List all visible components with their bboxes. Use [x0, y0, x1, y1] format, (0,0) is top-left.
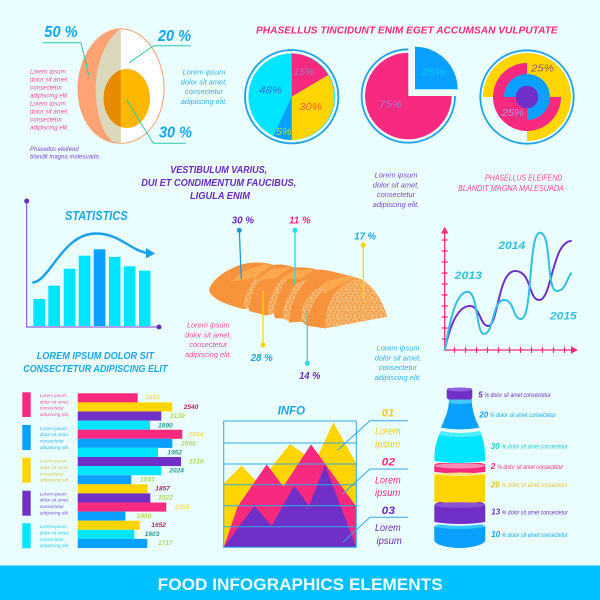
- bar values: [137, 395, 204, 547]
- pin 30 %: 30 %: [232, 214, 255, 226]
- label: 10 %: % dolor sit amet consectetur: [502, 533, 569, 539]
- panel: info area chart: [224, 403, 408, 547]
- purple text block: [30, 147, 100, 160]
- pie chart: four slices: 48%: [259, 84, 282, 96]
- purple text block: [373, 170, 419, 209]
- bars: [33, 249, 150, 326]
- label: 10 %: [491, 530, 569, 539]
- purple text block: blandit magna malesuada.: [30, 154, 100, 160]
- label: 30 %: % dolor sit amet consectetur: [502, 444, 569, 450]
- label: 5 %: [478, 390, 552, 399]
- bar values: 1650: [145, 395, 160, 402]
- item 01: ipsum: [375, 440, 400, 451]
- blue text block: dolor sit amet,: [181, 77, 227, 86]
- legend text: adipiscing elit.: [40, 445, 69, 450]
- leader lines: [338, 421, 408, 542]
- label: 20 %: [478, 411, 557, 420]
- label: 2 %: 2: [490, 462, 496, 471]
- bar values: 2130: [169, 413, 185, 420]
- label: 10 %: 10: [491, 530, 501, 539]
- heading: bread: LIGULA ENIM: [190, 190, 250, 202]
- item 01: [375, 408, 401, 451]
- legend text: Lorem ipsum: [40, 524, 67, 529]
- axes: [24, 198, 162, 330]
- pink text block: [185, 320, 232, 359]
- label: 30 %: [491, 442, 569, 451]
- pin 14 %: 14 %: [299, 370, 321, 382]
- mountains: [224, 422, 356, 547]
- legend text: consectetur: [40, 406, 64, 411]
- pink text block: adipiscing elit.: [30, 92, 69, 100]
- legend text: dolor sit amet,: [40, 530, 69, 536]
- legend text: adipiscing elit.: [40, 478, 69, 483]
- blue text block: adipiscing elit.: [375, 373, 421, 382]
- bar values: 2024: [168, 468, 184, 475]
- item 03: 03: [382, 505, 395, 517]
- bar values: 1450: [137, 513, 152, 520]
- purple text block: Phasellus eleifend: [30, 147, 79, 153]
- blue text block: consectetur: [379, 363, 418, 372]
- panel: line chart: [441, 173, 578, 354]
- label: 5 %: % dolor sit amet consectetur: [484, 393, 552, 399]
- bar values: 1717: [158, 540, 173, 547]
- purple text block: consectetur: [377, 190, 416, 199]
- label: 20 %: 20 %: [157, 28, 191, 45]
- heading: [458, 173, 564, 193]
- heading: PHASELLUS ELEIFEND: [485, 173, 562, 182]
- heading: bars: CONSECTETUR ADIPISCING ELIT: [23, 364, 168, 375]
- label: 2014: 2014: [497, 240, 525, 252]
- pie chart: exploded quarter: 25%: [421, 67, 445, 79]
- purple text block: dolor sit amet,: [373, 180, 419, 189]
- pin 14 %: [299, 310, 321, 382]
- radial chart: 25%: [501, 107, 524, 119]
- bar values: 2540: [183, 404, 199, 411]
- item 03: ipsum: [376, 536, 402, 547]
- pink text block: consectetur: [189, 340, 228, 349]
- item 02: Lorem: [375, 475, 401, 486]
- bar values: 2210: [188, 458, 204, 465]
- panel: bottle: [434, 388, 569, 548]
- legend text: consectetur: [40, 504, 64, 509]
- label: 5 %: 5: [478, 390, 483, 399]
- pie chart: exploded quarter: [362, 47, 458, 143]
- pink text block: adipiscing elit.: [185, 350, 232, 359]
- label: 2015: 2015: [549, 311, 578, 323]
- item 02: 02: [382, 457, 395, 469]
- legend text: Lorem ipsum: [40, 426, 67, 431]
- item 03: Lorem: [375, 523, 401, 534]
- pie chart: exploded quarter: 75%: [379, 99, 402, 111]
- bottle illustration: [434, 388, 485, 548]
- pin 11 %: 11 %: [289, 214, 311, 226]
- pink text block: Lorem ipsum: [30, 68, 66, 76]
- heading: info: INFO: [278, 403, 306, 417]
- label: 30 %: 30 %: [159, 125, 192, 142]
- footer banner: FOOD INFOGRAPHICS ELEMENTS: [158, 575, 443, 594]
- pie chart: four slices: 30%: [299, 101, 322, 113]
- footer banner: [0, 566, 600, 600]
- pink text block: dolor sit amet,: [30, 76, 69, 84]
- item 03: [375, 505, 402, 547]
- label: 50 %: 50 %: [44, 24, 78, 41]
- legend text: dolor sit amet,: [40, 399, 69, 404]
- bar values: 1603: [145, 531, 160, 538]
- pin 30 %: [232, 214, 255, 279]
- panel: bread chart: [185, 170, 421, 382]
- pie chart: four slices: 15%: [294, 66, 314, 78]
- label: 30 %: 30: [491, 442, 500, 451]
- legend text: adipiscing elit.: [40, 510, 69, 515]
- bar values: 2355: [174, 504, 190, 511]
- item 01: 01: [382, 408, 394, 420]
- legend text: dolor sit amet,: [40, 498, 69, 503]
- pink text block: Lorem ipsum: [30, 100, 66, 108]
- label: 20 %: 20: [478, 411, 489, 420]
- line: purple series: [445, 241, 572, 350]
- legend swatches: [22, 392, 31, 548]
- legend text: Lorem ipsum: [40, 491, 67, 496]
- axes: [441, 227, 578, 354]
- legend text: consectetur: [40, 471, 64, 476]
- pie chart: four slices: [245, 50, 338, 143]
- legend text: Lorem ipsum: [40, 459, 67, 464]
- item 02: [375, 457, 401, 499]
- pin 17 %: [354, 230, 377, 298]
- purple text block: Lorem ipsum: [375, 170, 417, 180]
- bar values: 1541: [140, 477, 155, 484]
- item 02: ipsum: [375, 488, 400, 499]
- pin 17 %: 17 %: [354, 230, 377, 242]
- bar values: 2560: [180, 440, 196, 447]
- panel: horizontal bar chart: [22, 392, 204, 548]
- egg illustration: [78, 29, 164, 143]
- label: 13 %: 13: [491, 508, 501, 517]
- heading: bread: VESTIBULUM VARIUS,: [170, 164, 267, 176]
- purple text block: adipiscing elit.: [373, 200, 419, 209]
- label: 13 %: [491, 508, 569, 517]
- bar values: 1952: [167, 449, 182, 456]
- bar values: 2654: [188, 431, 204, 438]
- line: blue series: [445, 233, 572, 350]
- pin 11 %: [289, 214, 311, 284]
- pink text block: dolor sit amet,: [30, 108, 69, 116]
- blue text block: adipiscing elit.: [181, 97, 227, 106]
- legend text: [40, 393, 69, 548]
- bar values: 1922: [158, 495, 173, 502]
- legend text: Lorem ipsum: [40, 393, 67, 398]
- legend text: dolor sit amet,: [40, 465, 69, 470]
- radial chart: 25%: [530, 63, 554, 75]
- pink text block: consectetur: [30, 84, 63, 92]
- leader lines: [43, 43, 191, 143]
- bar values: 1890: [158, 422, 173, 429]
- pin 28 %: [250, 291, 273, 364]
- heading: bread: DUI ET CONDIMENTUM FAUCIBUS,: [141, 177, 296, 189]
- legend text: adipiscing elit.: [40, 543, 69, 548]
- grid frame: [224, 421, 356, 547]
- label: 20 %: [490, 480, 569, 489]
- bars: [78, 393, 182, 548]
- heading: BLANDIT MAGNA MALESUADA: [458, 184, 564, 193]
- heading: bars: [23, 351, 168, 375]
- heading: bread: [141, 164, 296, 202]
- blue text block: [375, 344, 421, 382]
- blue text block: consectetur: [185, 87, 224, 96]
- legend text: adipiscing elit.: [40, 412, 69, 417]
- label: 2 %: [490, 462, 564, 471]
- legend text: consectetur: [40, 537, 64, 542]
- panel: statistics chart: [24, 198, 162, 330]
- pink text block: dolor sit amet,: [185, 330, 232, 339]
- bar values: 1652: [151, 522, 166, 529]
- label: 20 %: 20: [490, 480, 500, 489]
- radial chart: [480, 50, 574, 144]
- trend arrow: [32, 233, 155, 282]
- blue text block: dolor sit amet,: [375, 353, 421, 362]
- blue text block: Lorem ipsum: [183, 68, 225, 76]
- pink text block: adipiscing elit.: [30, 124, 69, 132]
- pink text block: [30, 68, 69, 132]
- bread illustration: [209, 262, 387, 328]
- heading: pie charts: PHASELLUS TINCIDUNT ENIM EGET ACCUMSAN VULPUTATE: [256, 24, 559, 36]
- legend text: consectetur: [40, 438, 64, 444]
- pie chart: four slices: 5%: [276, 126, 292, 138]
- bar values: 1857: [155, 486, 170, 493]
- label: 20 %: % dolor sit amet consectetur: [502, 483, 569, 489]
- blue text block: [181, 68, 227, 106]
- heading: statistics: STATISTICS: [65, 209, 128, 223]
- pink text block: Lorem ipsum: [187, 320, 230, 330]
- panel: egg diagram: [30, 24, 227, 160]
- label: 2013: 2013: [454, 270, 482, 282]
- legend text: dolor sit amet,: [40, 432, 69, 437]
- label: 13 %: % dolor sit amet consectetur: [502, 510, 569, 516]
- pin 28 %: 28 %: [250, 352, 273, 364]
- pink text block: consectetur: [30, 116, 63, 124]
- heading: bars: LOREM IPSUM DOLOR SIT: [37, 351, 155, 362]
- label: 20 %: % dolor sit amet consectetur: [490, 413, 557, 419]
- item 01: Lorem: [375, 426, 401, 437]
- label: 2 %: % dolor sit amet consectetur: [497, 465, 564, 471]
- blue text block: Lorem ipsum: [377, 344, 419, 352]
